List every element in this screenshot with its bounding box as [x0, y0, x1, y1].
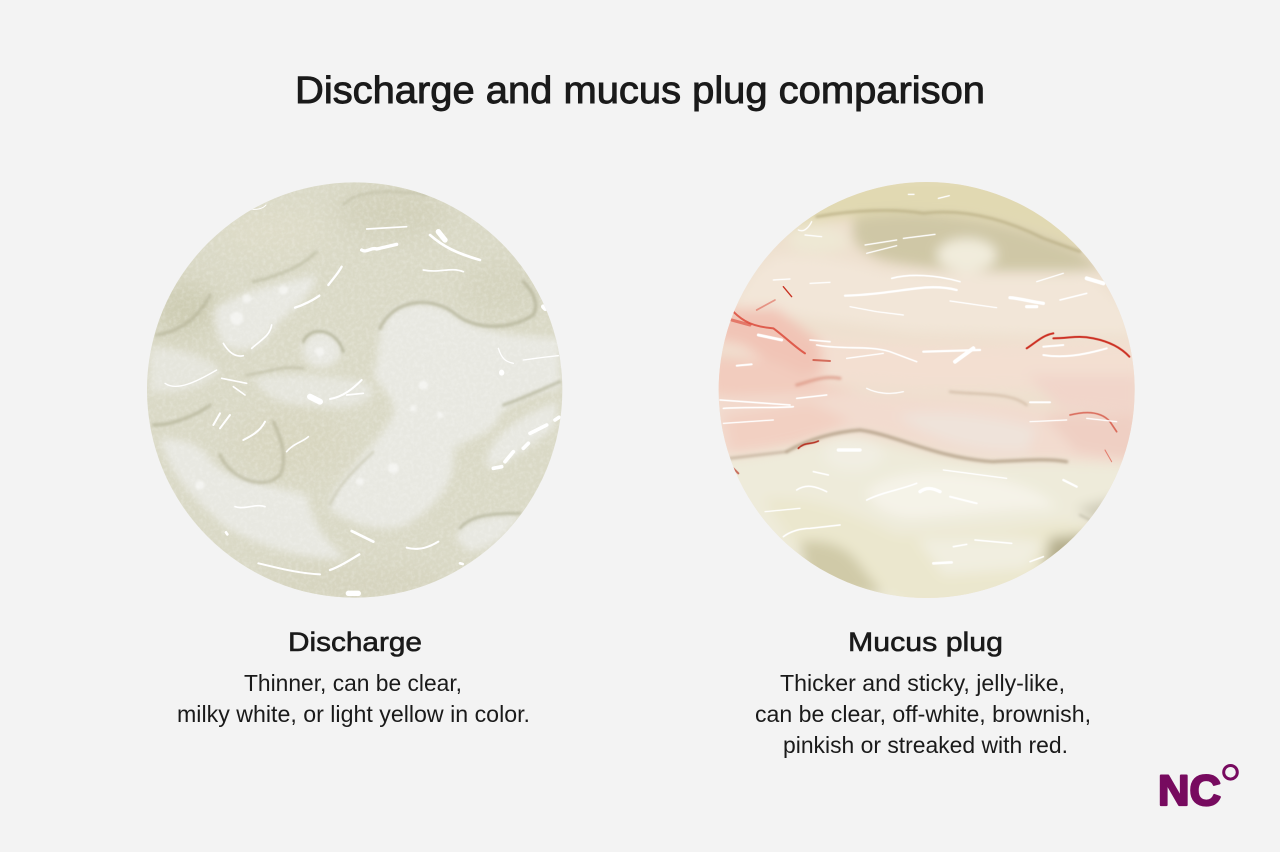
title: Discharge and mucus plug comparison [295, 70, 985, 112]
glossy highlights [720, 194, 1117, 563]
panel: mucus plug [710, 175, 1140, 758]
text: mucus plug description: Thicker and sticky, jelly-like, [780, 670, 1065, 696]
red streaks [732, 287, 1129, 473]
text: mucus plug description [755, 670, 1091, 758]
panel: discharge [140, 175, 570, 727]
glossy highlights [165, 205, 559, 593]
heading: discharge: Discharge [288, 627, 422, 657]
text: discharge description: milky white, or light yellow in color. [177, 701, 530, 727]
heading: mucus plug: Mucus plug [848, 627, 1003, 657]
photo: mucus plug texture [710, 175, 1140, 605]
lower cream bands [732, 444, 1120, 554]
surface grain [140, 175, 570, 605]
pink middle bands [717, 311, 1140, 392]
logo: NC: NC [1158, 767, 1221, 815]
soft ridges [380, 282, 536, 328]
text: discharge description [177, 670, 530, 727]
white frothy patches [150, 275, 560, 559]
text: discharge description: Thinner, can be clear, [244, 670, 462, 696]
photo: discharge texture [140, 175, 570, 605]
text: mucus plug description: can be clear, off-white, brownish, [755, 701, 1091, 727]
creases [787, 430, 1067, 462]
infographic canvas [147, 75, 1239, 807]
top olive band [796, 182, 1080, 250]
text: mucus plug description: pinkish or streaked with red. [783, 732, 1068, 758]
